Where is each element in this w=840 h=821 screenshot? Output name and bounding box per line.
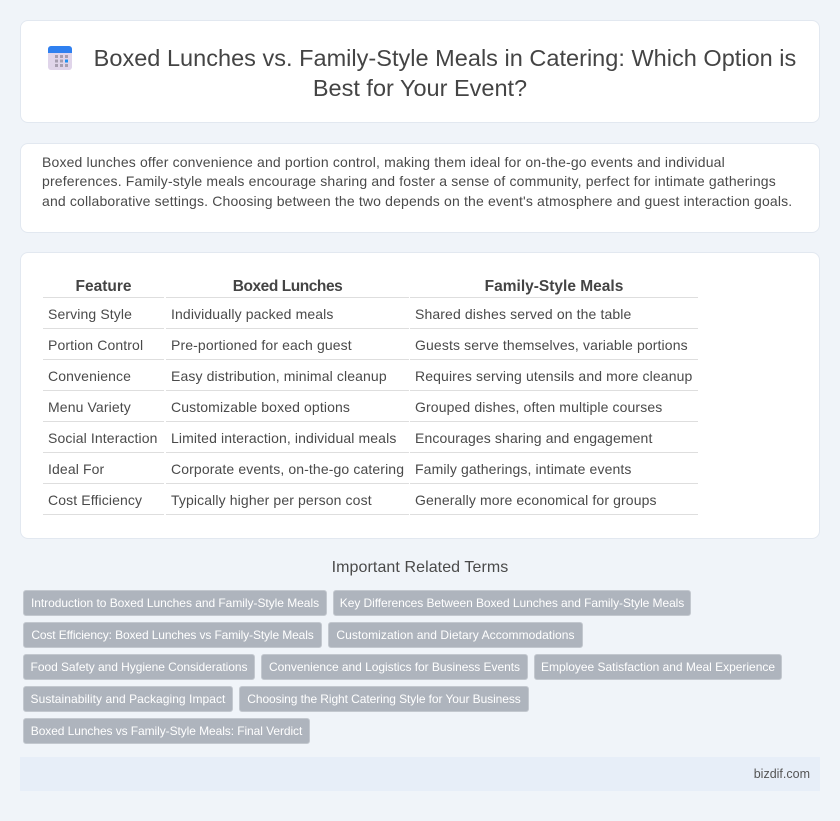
title: Boxed Lunches vs. Family-Style Meals in Catering: Which Option is <box>94 45 796 71</box>
table header <box>76 278 623 295</box>
tag <box>23 686 233 712</box>
tag: Key Differences Between Boxed Lunches and Family-Style Meals <box>340 596 684 610</box>
row: cost efficiency: Cost Efficiency <box>48 492 142 508</box>
row: ideal for: Corporate events, on-the-go catering <box>171 461 404 477</box>
tag <box>261 654 528 680</box>
row: serving style: Shared dishes served on the table <box>415 306 631 322</box>
row: portion control: Pre-portioned for each guest <box>171 337 352 353</box>
row: menu variety: Customizable boxed options <box>171 399 350 415</box>
row: serving style: Serving Style <box>48 306 132 322</box>
row: convenience: Requires serving utensils and more cleanup <box>415 368 692 384</box>
table header: Family-Style Meals <box>485 278 623 295</box>
row: cost efficiency: Generally more economical for groups <box>415 492 657 508</box>
row: social interaction <box>48 430 652 446</box>
tag <box>23 622 322 648</box>
panel: title card <box>20 20 820 123</box>
row: portion control: Portion Control <box>48 337 143 353</box>
panel: intro paragraph <box>20 143 820 233</box>
tag: Convenience and Logistics for Business Events <box>269 660 520 674</box>
tag <box>23 654 255 680</box>
tag: Introduction to Boxed Lunches and Family-Style Meals <box>31 596 319 610</box>
tag: Boxed Lunches vs Family-Style Meals: Final Verdict <box>31 724 302 738</box>
tag <box>23 590 327 616</box>
row: portion control <box>48 337 688 353</box>
row: ideal for: Family gatherings, intimate events <box>415 461 632 477</box>
text block: intro <box>42 154 792 209</box>
tag <box>534 654 782 680</box>
row: convenience: Easy distribution, minimal cleanup <box>171 368 387 384</box>
row: serving style <box>48 306 631 322</box>
row: ideal for: Ideal For <box>48 461 104 477</box>
footer <box>20 757 820 791</box>
row: cost efficiency: Typically higher per person cost <box>171 492 372 508</box>
tag <box>328 622 583 648</box>
tag <box>333 590 691 616</box>
row: convenience: Convenience <box>48 368 131 384</box>
row: menu variety: Menu Variety <box>48 399 131 415</box>
row: social interaction: Encourages sharing and engagement <box>415 430 652 446</box>
text block: intro: preferences. Family-style meals encourage sharing and foster a sense of community, perfect for intimate gatherings <box>42 173 776 189</box>
panel: comparison table <box>20 252 820 539</box>
row: portion control: Guests serve themselves, variable portions <box>415 337 688 353</box>
tag <box>23 718 310 744</box>
row: cost efficiency <box>48 492 657 508</box>
tag: Customization and Dietary Accommodations <box>336 628 575 642</box>
tag list <box>23 590 782 744</box>
text block: intro: and collaborative settings. Choosing between the two depends on the event's atmosphere and guest interaction goals. <box>42 192 792 208</box>
tag: Cost Efficiency: Boxed Lunches vs Family-Style Meals <box>31 628 314 642</box>
row: menu variety: Grouped dishes, often multiple courses <box>415 399 662 415</box>
icon: calendar <box>48 46 72 70</box>
title <box>94 45 796 101</box>
tag: Food Safety and Hygiene Considerations <box>31 660 247 674</box>
table header: Boxed Lunches <box>233 278 342 295</box>
row: convenience <box>48 368 692 384</box>
row: menu variety <box>48 399 662 415</box>
heading: important related terms: Important Related Terms <box>332 559 508 576</box>
tag: Sustainability and Packaging Impact <box>31 692 225 706</box>
row: social interaction: Social Interaction <box>48 430 158 446</box>
title: Best for Your Event? <box>313 75 527 101</box>
tag: Choosing the Right Catering Style for Your Business <box>247 692 521 706</box>
tag: Employee Satisfaction and Meal Experience <box>541 660 775 674</box>
text block: intro: Boxed lunches offer convenience and portion control, making them ideal for on-the-go events and individual <box>42 154 725 170</box>
table header: Feature <box>76 278 132 295</box>
row: social interaction: Limited interaction, individual meals <box>171 430 396 446</box>
tag <box>239 686 529 712</box>
row: serving style: Individually packed meals <box>171 306 334 322</box>
row: ideal for <box>48 461 632 477</box>
footer text: bizdif.com <box>754 767 810 781</box>
